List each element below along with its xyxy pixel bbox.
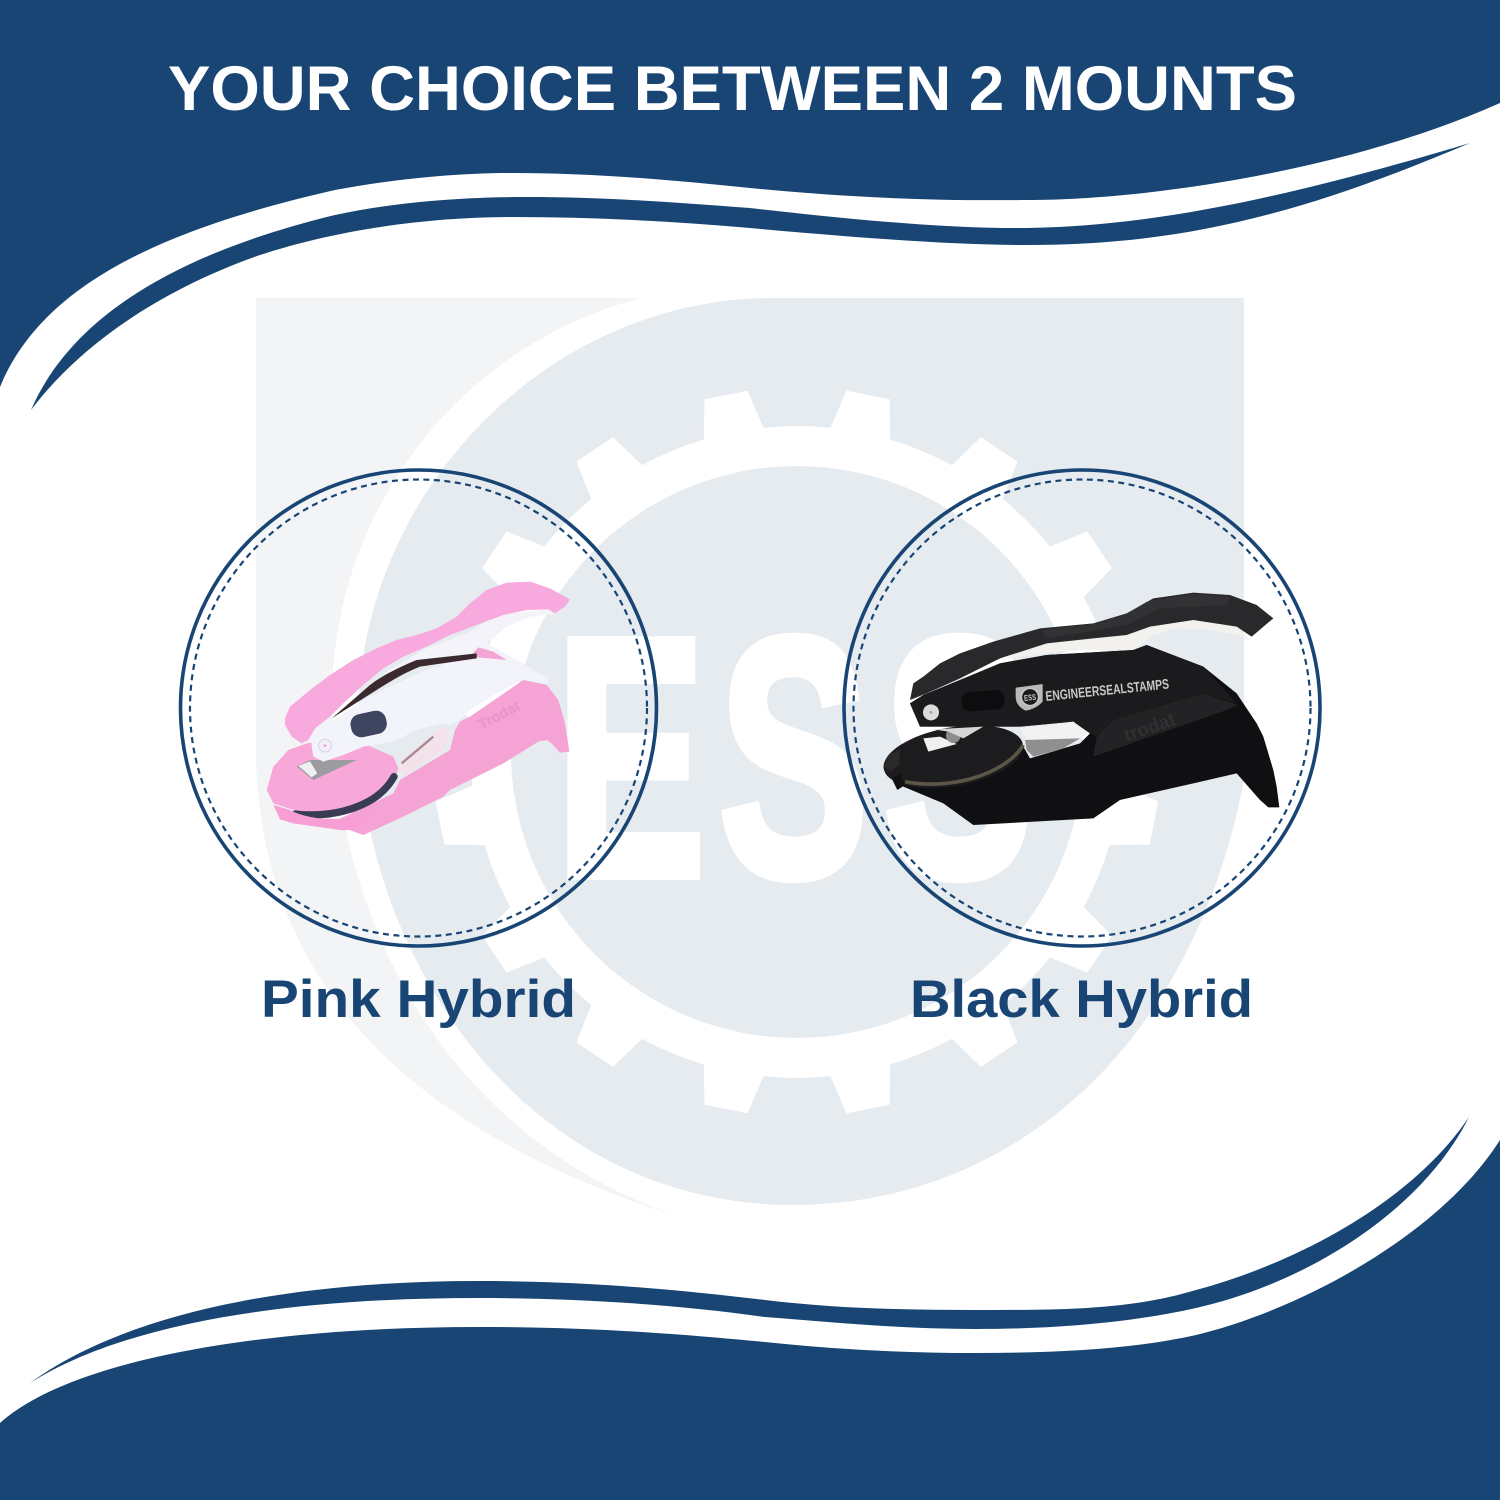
label: pink hybrid: Pink Hybrid xyxy=(261,970,576,1029)
bottom banner shape xyxy=(0,1140,1500,1500)
watermark: ESS shield and gear logo: S xyxy=(719,568,868,948)
logo: ENGINEERSEALSTAMPS on body: ESS xyxy=(1024,692,1037,703)
panel: black hybrid option xyxy=(844,470,1320,1029)
bottom swoosh xyxy=(30,1117,1469,1383)
logo: ENGINEERSEALSTAMPS on body: ENGINEERSEALSTAMPS xyxy=(1045,676,1170,704)
circle frame: pink xyxy=(180,470,656,946)
panel: pink hybrid option xyxy=(180,470,656,1029)
title: YOUR CHOICE BETWEEN 2 MOUNTS xyxy=(168,54,1297,124)
top banner shape xyxy=(0,0,1500,387)
product: black embosser xyxy=(879,593,1279,825)
circle frame: black xyxy=(844,470,1320,946)
product: pink embosser: Trodat xyxy=(476,698,523,734)
label: black hybrid: Black Hybrid xyxy=(910,970,1253,1029)
logo: ENGINEERSEALSTAMPS on body xyxy=(1016,676,1170,711)
watermark: ESS shield and gear logo xyxy=(256,298,1244,1217)
watermark: ESS shield and gear logo: E xyxy=(556,568,705,948)
product: black embosser: trodat xyxy=(1121,708,1178,745)
watermark: ESS shield and gear logo: S xyxy=(884,568,1033,948)
top swoosh xyxy=(31,143,1470,410)
product: pink embosser xyxy=(267,582,570,835)
